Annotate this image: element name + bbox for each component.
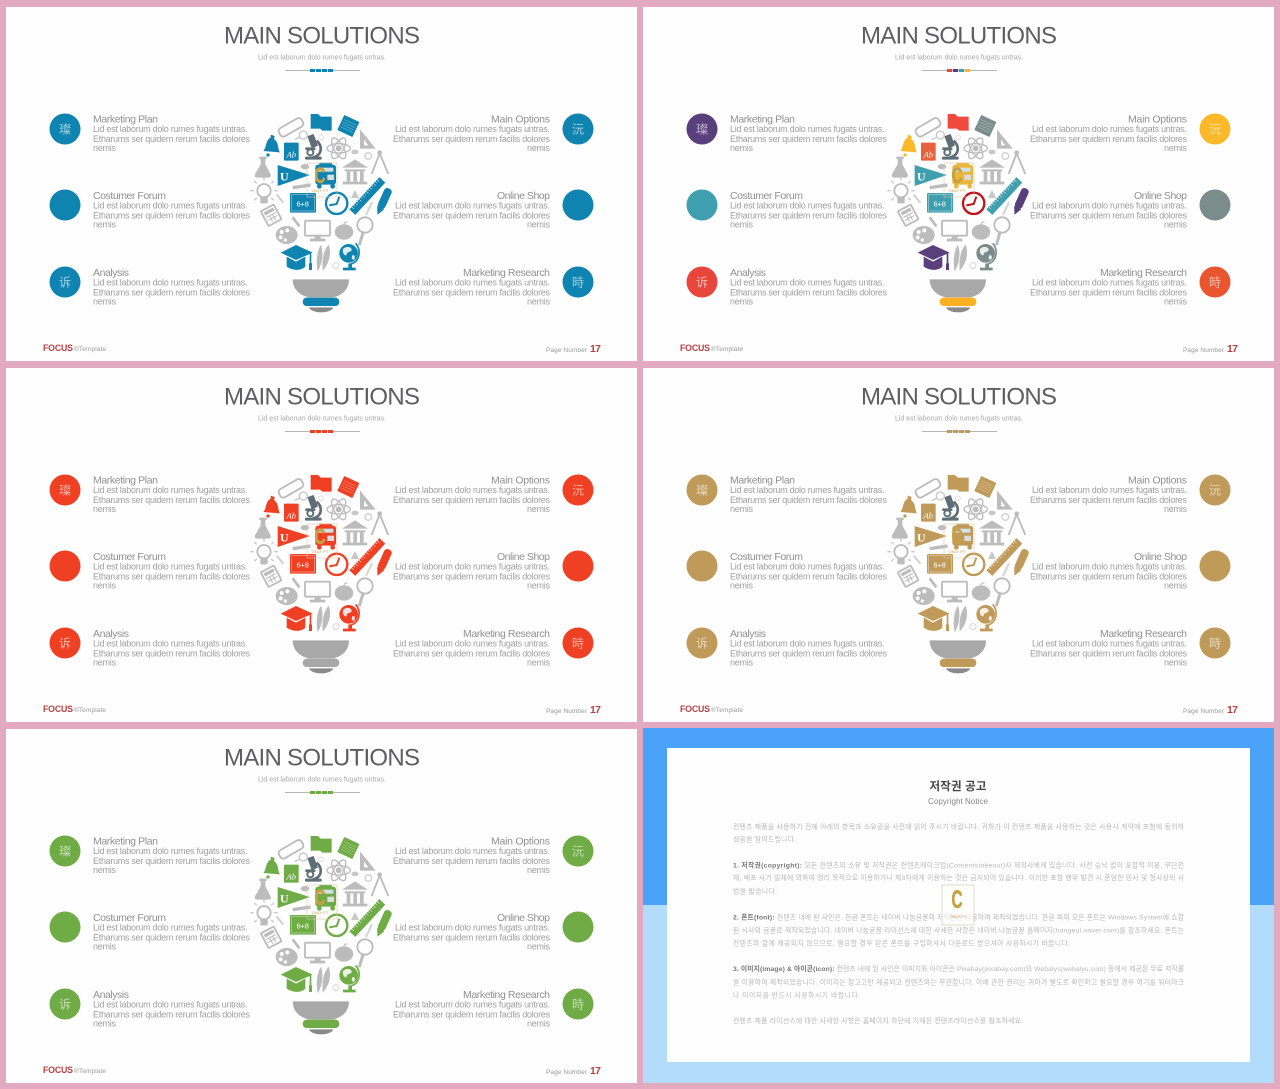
item: Online Shop: Etharums ser quidem rerum facilis dolores (393, 210, 550, 220)
item: Costumer Forum: Lid est laborum dolo rumes fugats untras. (93, 922, 248, 932)
item: Costumer Forum (50, 550, 250, 590)
item: Online Shop: Online Shop (497, 551, 550, 563)
watermark: C (314, 524, 326, 549)
item: Marketing Research (393, 266, 594, 306)
item: Marketing Research: Etharums ser quidem rerum facilis dolores (393, 288, 550, 298)
item: Analysis: Lid est laborum dolo rumes fugats untras. (93, 638, 248, 648)
item: Marketing Research: 時 (572, 636, 584, 650)
slide 6: copyright notice (643, 728, 1274, 1083)
footer logo: ®Template (74, 1067, 106, 1075)
item: Costumer Forum: Costumer Forum (93, 551, 166, 563)
watermark: ONLY PT (949, 188, 966, 193)
divider (285, 69, 360, 72)
item: Main Options: Main Options (491, 114, 550, 126)
divider (285, 791, 360, 794)
item: Marketing Plan: Etharums ser quidem rerum facilis dolores (93, 856, 250, 866)
page number: Page Number (1183, 708, 1225, 715)
item: Marketing Research: nemis (527, 1018, 550, 1028)
closing line: 컨텐츠 제품 라이선스에 대한 사세한 사항은 홈페이지 하단에 기재된 컨텐츠라이선스를 참조하세요. (733, 1016, 1023, 1025)
item: Analysis (50, 628, 250, 668)
item: Online Shop: Online Shop (497, 912, 550, 924)
item: Marketing Plan: nemis (730, 504, 754, 514)
item: Online Shop: Etharums ser quidem rerum facilis dolores (1030, 210, 1188, 220)
item: Analysis: Lid est laborum dolo rumes fugats untras. (730, 638, 884, 648)
title: MAIN SOLUTIONS (861, 384, 1057, 410)
notice heading: 저작권 공고 (930, 779, 987, 793)
footer logo: FOCUS (43, 704, 73, 714)
clause 3: 을 이용하여 제작되었습니다. 이미지는 참고고만 제공되고 컨텐츠와는 무관합니다. 이에 관한 권리는 귀하가 별도로 확인하고 필요할 경우 여기를 워터마크 (733, 978, 1184, 986)
title: MAIN SOLUTIONS (224, 22, 420, 50)
item: Costumer Forum (686, 550, 888, 590)
item: Main Options (1030, 474, 1230, 514)
item: Online Shop: Online Shop (497, 190, 550, 202)
item: Main Options: Lid est laborum dolo rumes fugats untras. (395, 124, 550, 134)
item: Online Shop: Lid est laborum dolo rumes fugats untras. (395, 200, 550, 210)
item: Online Shop: Lid est laborum dolo rumes fugats untras. (1032, 562, 1187, 572)
item: Marketing Research: nemis (527, 296, 550, 306)
item: Analysis: 诉 (59, 998, 71, 1012)
item: Main Options: nemis (1164, 143, 1188, 153)
intro paragraph (733, 822, 1185, 844)
page number (1183, 704, 1238, 716)
item: Marketing Research (1030, 266, 1230, 306)
item: Marketing Plan: Lid est laborum dolo rumes fugats untras. (93, 846, 248, 856)
item: Marketing Research: Marketing Research (1100, 628, 1187, 640)
item: Analysis: Lid est laborum dolo rumes fugats untras. (93, 278, 248, 288)
clause 3: 3. 이미지(image) & 아이콘(icon): 컨텐츠 내에 된 사인은 이미지와 아이콘은 Pixabay(pixabay.com)와 Webalys(webalys.com) 등에서 제공된 무료 저작물 (733, 964, 1184, 973)
item: Main Options (393, 114, 594, 153)
clause 3: 나 이미지를 반드시 사용하시기 바랍니다. (733, 990, 860, 1000)
footer logo (43, 704, 106, 714)
item: Analysis: 诉 (59, 276, 71, 290)
page number: Page Number (546, 1069, 588, 1076)
item: Marketing Plan (50, 114, 250, 153)
watermark (307, 163, 337, 197)
page number: 17 (590, 1065, 601, 1077)
divider (285, 430, 360, 433)
item: Marketing Plan: Etharums ser quidem rerum facilis dolores (93, 495, 250, 505)
item: Analysis: Lid est laborum dolo rumes fugats untras. (730, 278, 884, 288)
item: Costumer Forum: Etharums ser quidem rerum facilis dolores (93, 932, 250, 942)
item: Marketing Research: Etharums ser quidem rerum facilis dolores (393, 648, 550, 658)
item: Marketing Research: nemis (1164, 658, 1188, 668)
item: Main Options: nemis (1164, 504, 1188, 514)
lightbulb icon collage (250, 475, 393, 673)
item: Main Options: Lid est laborum dolo rumes fugats untras. (1032, 124, 1187, 134)
item: Analysis (686, 628, 888, 668)
item: Costumer Forum: nemis (93, 580, 116, 590)
item: Costumer Forum: nemis (93, 942, 116, 952)
watermark: ONLY PT (950, 914, 967, 919)
item: Online Shop: Etharums ser quidem rerum facilis dolores (1030, 572, 1188, 582)
item: Costumer Forum: Lid est laborum dolo rumes fugats untras. (730, 200, 884, 210)
item: Marketing Research: 時 (1209, 636, 1221, 650)
item: Marketing Plan: 璨 (59, 122, 71, 136)
item: Marketing Research (1030, 628, 1230, 668)
footer logo (680, 343, 743, 353)
page number (546, 343, 601, 355)
item: Main Options: 沅 (1209, 484, 1221, 498)
item: Analysis: nemis (93, 296, 116, 306)
item: Analysis: Etharums ser quidem rerum facilis dolores (93, 288, 250, 298)
item: Online Shop: nemis (527, 942, 550, 952)
item: Online Shop: Online Shop (1134, 551, 1187, 563)
item: Online Shop: nemis (527, 580, 550, 590)
item: Main Options: Etharums ser quidem rerum facilis dolores (1030, 495, 1188, 505)
item: Main Options: Main Options (1128, 114, 1187, 126)
watermark (942, 885, 974, 925)
item: Main Options: 沅 (572, 484, 584, 498)
item: Marketing Plan: 璨 (59, 844, 71, 858)
item: Marketing Research: Lid est laborum dolo rumes fugats untras. (1032, 638, 1187, 648)
item: Main Options: Main Options (1128, 474, 1187, 486)
item: Marketing Research: Marketing Research (1100, 267, 1187, 279)
clause 2: 된 시사의 글꼴로 제작되었습니다. 네이버 나눔글꼴 라이선스에 대한 사세한 사항은 네이버 나눔글꼴 홈페이지(hangeul.naver.com)를 참조하세요. 폰트는 (733, 926, 1184, 934)
item: Marketing Plan (50, 474, 250, 514)
item: Costumer Forum: Etharums ser quidem rerum facilis dolores (93, 210, 250, 220)
clause 1: 재, 배포 사기 일체에 의하여 영리 목적으로 이용하거나 제3자에게 이용하는 것은 금지되어 있습니다. 이러한 포함 행위 발견 시 준엄한 민사 및 형사상의 사 (733, 873, 1185, 882)
footer logo: FOCUS (43, 343, 73, 353)
lightbulb icon collage (887, 475, 1030, 673)
item: Marketing Plan: 璨 (696, 122, 708, 136)
item: Analysis: nemis (730, 296, 754, 306)
clause 2 (733, 912, 1184, 948)
item: Costumer Forum: Etharums ser quidem rerum facilis dolores (730, 572, 888, 582)
slide 2: multicolour (643, 7, 1274, 361)
watermark: ONLY PT (312, 188, 329, 193)
item: Marketing Plan: 璨 (59, 484, 71, 498)
clause 2: 컨텐츠의 함께 제공되지 않으므로, 필요할 경우 같은 폰트를 구입하셔서 다운로드 받으셔야 사용하시기 바랍니다. (733, 938, 1070, 948)
item: Costumer Forum (686, 190, 888, 230)
item: Marketing Research: 時 (572, 998, 584, 1012)
item: Online Shop: Etharums ser quidem rerum facilis dolores (393, 932, 550, 942)
title: MAIN SOLUTIONS (861, 22, 1057, 50)
lightbulb icon collage (250, 114, 393, 312)
item: Costumer Forum (50, 912, 250, 952)
item: Main Options: Etharums ser quidem rerum facilis dolores (393, 856, 550, 866)
item: Marketing Plan: Etharums ser quidem rerum facilis dolores (730, 134, 888, 144)
item: Marketing Research: Lid est laborum dolo rumes fugats untras. (395, 1000, 550, 1010)
item: Main Options: nemis (527, 143, 550, 153)
item: Marketing Plan: Lid est laborum dolo rumes fugats untras. (93, 124, 248, 134)
item: Marketing Research: 時 (572, 276, 584, 290)
item: Costumer Forum: Lid est laborum dolo rumes fugats untras. (93, 200, 248, 210)
watermark: C (952, 886, 962, 914)
item: Marketing Plan: Lid est laborum dolo rumes fugats untras. (730, 124, 884, 134)
footer logo: ®Template (711, 706, 743, 714)
item: Marketing Plan: Lid est laborum dolo rumes fugats untras. (93, 485, 248, 495)
lightbulb icon collage (887, 114, 1030, 312)
item: Marketing Research: Marketing Research (463, 989, 550, 1001)
item: Online Shop: nemis (1164, 220, 1188, 230)
footer logo: ®Template (711, 345, 743, 353)
item: Marketing Research (393, 988, 594, 1028)
item: Costumer Forum: nemis (730, 220, 754, 230)
title: MAIN SOLUTIONS (224, 384, 420, 410)
page number: 17 (1227, 343, 1238, 355)
item: Main Options (393, 836, 594, 875)
item: Analysis (50, 988, 250, 1028)
item: Marketing Plan: nemis (93, 504, 116, 514)
divider (922, 430, 997, 433)
footer logo: FOCUS (680, 704, 710, 714)
item: Online Shop: Lid est laborum dolo rumes fugats untras. (395, 562, 550, 572)
item: Marketing Research: Marketing Research (463, 628, 550, 640)
watermark (944, 524, 974, 558)
slide 4: tan (643, 368, 1274, 722)
item: Marketing Research: Etharums ser quidem rerum facilis dolores (393, 1010, 550, 1020)
footer logo: ®Template (74, 345, 106, 353)
item: Online Shop (393, 190, 594, 230)
item: Marketing Plan: nemis (93, 143, 116, 153)
item: Marketing Plan: Marketing Plan (93, 474, 158, 486)
divider (922, 69, 997, 72)
item: Analysis: Analysis (730, 267, 766, 279)
subtitle: Lid est laborum dolo rumes fugats untras. (258, 776, 386, 784)
item: Analysis: Etharums ser quidem rerum facilis dolores (93, 1010, 250, 1020)
subtitle: Lid est laborum dolo rumes fugats untras. (258, 54, 386, 62)
watermark: C (314, 163, 326, 188)
intro paragraph: 셨음을 알려드립니다. (733, 834, 796, 844)
title: MAIN SOLUTIONS (224, 744, 420, 772)
item: Online Shop: Lid est laborum dolo rumes fugats untras. (395, 922, 550, 932)
item: Main Options: 沅 (572, 844, 584, 858)
item: Costumer Forum: nemis (730, 580, 754, 590)
item: Analysis: Analysis (730, 628, 766, 640)
item: Analysis: Analysis (93, 989, 129, 1001)
item: Marketing Research: Lid est laborum dolo rumes fugats untras. (395, 278, 550, 288)
slide 1: blue (6, 7, 637, 361)
item: Costumer Forum: nemis (93, 220, 116, 230)
page number (546, 704, 601, 716)
item: Online Shop (1030, 190, 1230, 230)
page number: Page Number (546, 347, 588, 354)
watermark: C (952, 524, 963, 549)
item: Online Shop: nemis (1164, 580, 1188, 590)
item: Analysis (50, 266, 250, 306)
item: Online Shop (393, 550, 594, 590)
item: Online Shop: Lid est laborum dolo rumes fugats untras. (1032, 200, 1187, 210)
footer logo (43, 343, 106, 353)
item: Marketing Research: 時 (1209, 276, 1221, 290)
item: Marketing Plan: Marketing Plan (93, 836, 158, 848)
item: Main Options: 沅 (572, 122, 584, 136)
item: Main Options: nemis (527, 865, 550, 875)
page number: 17 (590, 704, 601, 716)
footer logo (680, 704, 743, 714)
clause 1: 법을 밟습니다. (733, 886, 777, 896)
item: Analysis: 诉 (59, 636, 71, 650)
item: Marketing Plan: Marketing Plan (93, 114, 158, 126)
item: Marketing Research: Marketing Research (463, 267, 550, 279)
item: Analysis: Analysis (93, 267, 129, 279)
item: Marketing Research: nemis (1164, 296, 1188, 306)
item: Analysis: 诉 (696, 636, 708, 650)
item: Marketing Plan (686, 474, 888, 514)
item: Marketing Plan (50, 836, 250, 875)
item: Marketing Plan: Marketing Plan (730, 114, 795, 126)
item: Analysis: nemis (730, 658, 754, 668)
item: Analysis: 诉 (696, 276, 708, 290)
page number: Page Number (546, 708, 588, 715)
item: Marketing Research: Etharums ser quidem rerum facilis dolores (1030, 648, 1188, 658)
item: Analysis (686, 266, 888, 306)
watermark: ONLY PT (949, 549, 966, 554)
item: Costumer Forum: Lid est laborum dolo rumes fugats untras. (93, 562, 248, 572)
item: Marketing Research (393, 628, 594, 668)
item: Costumer Forum (50, 190, 250, 230)
item: Marketing Plan: Etharums ser quidem rerum facilis dolores (730, 495, 888, 505)
page number: Page Number (1183, 347, 1225, 354)
item: Analysis: Etharums ser quidem rerum facilis dolores (730, 648, 888, 658)
item: Analysis: Etharums ser quidem rerum facilis dolores (730, 288, 888, 298)
item: Costumer Forum: Costumer Forum (730, 551, 803, 563)
item: Marketing Research: Etharums ser quidem rerum facilis dolores (1030, 288, 1188, 298)
watermark: ONLY PT (312, 549, 329, 554)
item: Online Shop (393, 912, 594, 952)
item: Main Options: Etharums ser quidem rerum facilis dolores (393, 134, 550, 144)
page number: 17 (1227, 704, 1238, 716)
watermark (307, 524, 337, 558)
subtitle: Lid est laborum dolo rumes fugats untras. (258, 416, 386, 422)
item: Marketing Plan: 璨 (696, 484, 708, 498)
item: Online Shop: nemis (527, 220, 550, 230)
slide 5: green (6, 729, 637, 1083)
clause 3 (733, 964, 1184, 1000)
page number: 17 (590, 343, 601, 355)
item: Main Options (1030, 114, 1230, 153)
subtitle: Lid est laborum dolo rumes fugats untras. (895, 416, 1023, 422)
item: Analysis: nemis (93, 658, 116, 668)
lightbulb icon collage (250, 836, 393, 1034)
item: Main Options: Etharums ser quidem rerum facilis dolores (1030, 134, 1188, 144)
watermark (307, 885, 337, 919)
item: Costumer Forum: Costumer Forum (730, 190, 803, 202)
item: Costumer Forum: Costumer Forum (93, 912, 166, 924)
item: Main Options: 沅 (1209, 122, 1221, 136)
item: Main Options: Main Options (491, 836, 550, 848)
item: Costumer Forum: Etharums ser quidem rerum facilis dolores (730, 210, 888, 220)
item: Analysis: Etharums ser quidem rerum facilis dolores (93, 648, 250, 658)
item: Marketing Research: Lid est laborum dolo rumes fugats untras. (395, 638, 550, 648)
footer logo (43, 1065, 106, 1075)
item: Costumer Forum: Lid est laborum dolo rumes fugats untras. (730, 562, 884, 572)
item: Online Shop (1030, 550, 1230, 590)
item: Analysis: nemis (93, 1018, 116, 1028)
watermark: ONLY PT (312, 910, 329, 915)
page number (546, 1065, 601, 1077)
item: Main Options (393, 474, 594, 514)
item: Marketing Plan: nemis (730, 143, 754, 153)
item: Marketing Plan (686, 114, 888, 153)
item: Online Shop: Online Shop (1134, 190, 1187, 202)
item: Main Options: Lid est laborum dolo rumes fugats untras. (395, 846, 550, 856)
item: Costumer Forum: Etharums ser quidem rerum facilis dolores (93, 572, 250, 582)
watermark: C (314, 885, 326, 910)
item: Main Options: Main Options (491, 474, 550, 486)
slide 3: red (6, 368, 637, 722)
item: Main Options: nemis (527, 504, 550, 514)
item: Marketing Plan: Marketing Plan (730, 474, 795, 486)
clause 2: 2. 폰트(font): 컨텐츠 내에 된 사인은, 한글 폰트는 네이버 나눔글꼴의 저작물을 사용하여 제작되었습니다. 한글 외의 모든 폰트는 Windows System에 쇼함 (733, 912, 1184, 922)
clause 1: 1. 저작권(copyright): 모든 컨텐츠의 소유 및 저작권은 컨텐츠메이크업(Contentstokeout)사 제작사에게 있습니다. 사전 승낙 없이 포함적 이용, 무단전 (733, 860, 1184, 870)
watermark: C (952, 163, 963, 188)
item: Main Options: Lid est laborum dolo rumes fugats untras. (1032, 485, 1187, 495)
item: Marketing Plan: Lid est laborum dolo rumes fugats untras. (730, 485, 884, 495)
item: Costumer Forum: Costumer Forum (93, 190, 166, 202)
intro paragraph: 컨텐츠 제품을 사용하기 전에 아래의 항목과 소유권을 사전에 읽어 주시기 바랍니다. 귀하가 이 컨텐츠 제품을 사용하는 것은 사용시 계약에 포함에 동의하 (733, 822, 1185, 831)
watermark (944, 163, 974, 197)
footer logo: FOCUS (680, 343, 710, 353)
item: Main Options: Lid est laborum dolo rumes fugats untras. (395, 485, 550, 495)
clause 1 (733, 860, 1185, 896)
item: Online Shop: Etharums ser quidem rerum facilis dolores (393, 572, 550, 582)
item: Marketing Plan: nemis (93, 865, 116, 875)
item: Analysis: Analysis (93, 628, 129, 640)
footer logo: ®Template (74, 706, 106, 714)
subtitle: Lid est laborum dolo rumes fugats untras. (895, 54, 1023, 62)
footer logo: FOCUS (43, 1065, 73, 1075)
item: Marketing Research: Lid est laborum dolo rumes fugats untras. (1032, 278, 1187, 288)
item: Analysis: Lid est laborum dolo rumes fugats untras. (93, 1000, 248, 1010)
item: Main Options: Etharums ser quidem rerum facilis dolores (393, 495, 550, 505)
page number (1183, 343, 1238, 355)
notice subheading: Copyright Notice (928, 797, 989, 806)
item: Marketing Plan: Etharums ser quidem rerum facilis dolores (93, 134, 250, 144)
item: Marketing Research: nemis (527, 658, 550, 668)
